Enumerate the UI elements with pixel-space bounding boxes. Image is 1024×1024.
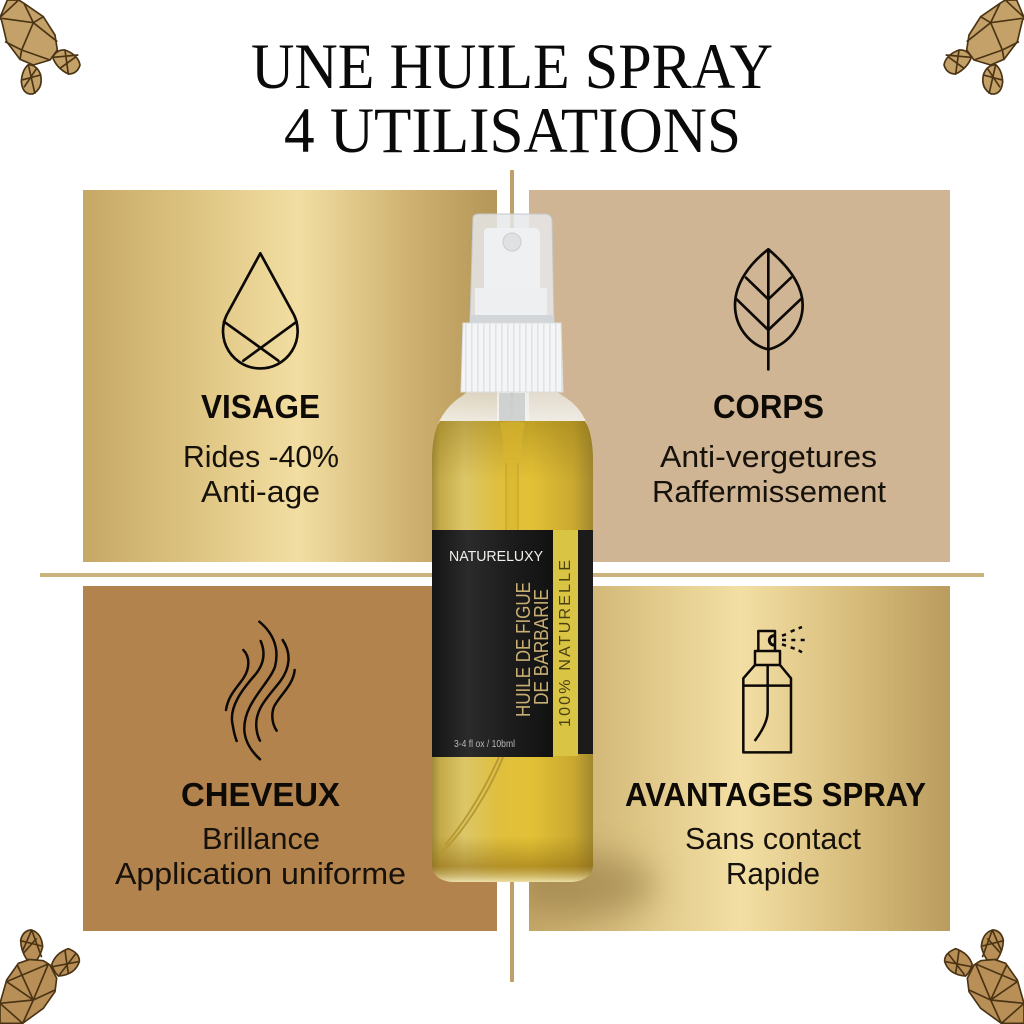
- heading: cheveux: CHEVEUX: [181, 776, 340, 813]
- decorative turtle: top right: [944, 0, 1024, 94]
- decorative turtle: top left: [0, 0, 80, 94]
- decorative turtle: bottom left: [0, 930, 79, 1023]
- text: spray benefits: Rapide: [726, 856, 820, 891]
- text: corps benefits: Raffermissement: [652, 474, 886, 509]
- text: visage benefits: Anti-age: [201, 474, 320, 509]
- icon: water drop: [223, 253, 298, 368]
- text: cheveux benefits: Brillance: [202, 821, 320, 856]
- oil: [432, 421, 593, 882]
- heading: visage: VISAGE: [201, 388, 320, 425]
- product name: DE BARBARIE: [531, 589, 553, 705]
- outer cap: [470, 214, 554, 323]
- panel: visage: [83, 190, 497, 562]
- product name: [513, 582, 553, 717]
- heading: avantages spray: AVANTAGES SPRAY: [625, 776, 926, 813]
- product name: HUILE DE FIGUE: [513, 582, 535, 717]
- label: [432, 530, 593, 757]
- text: cheveux benefits: Application uniforme: [115, 856, 406, 891]
- ribbed collar: [461, 323, 563, 392]
- title: 4 UTILISATIONS: [284, 95, 741, 167]
- product: spray bottle: [432, 214, 593, 882]
- panel: avantages spray: [515, 586, 950, 931]
- brand name: NATURELUXY: [449, 549, 543, 565]
- text: corps benefits: [652, 439, 886, 509]
- title: [251, 31, 773, 167]
- text: corps benefits: Anti-vergetures: [660, 439, 877, 474]
- bottle glass shoulder: [438, 392, 587, 424]
- natural claim: 100% NATURELLE: [557, 560, 574, 727]
- icon: spray bottle: [743, 627, 805, 752]
- dip tube: [442, 393, 525, 852]
- text: visage benefits: Rides -40%: [183, 439, 339, 474]
- heading: corps: CORPS: [713, 388, 824, 425]
- volume: 3-4 fl ox / 10bml: [454, 738, 515, 750]
- text: spray benefits: Sans contact: [685, 821, 861, 856]
- text: spray benefits: [685, 821, 861, 891]
- bottle shadow: [515, 853, 655, 917]
- panel: corps: [529, 190, 950, 562]
- text: cheveux benefits: [115, 821, 406, 891]
- icon: hair strands: [226, 622, 295, 759]
- decorative turtle: bottom right: [945, 930, 1024, 1023]
- panel: cheveux: [83, 586, 497, 931]
- text: visage benefits: [183, 439, 339, 509]
- title: UNE HUILE SPRAY: [251, 31, 773, 103]
- icon: leaf: [735, 249, 803, 369]
